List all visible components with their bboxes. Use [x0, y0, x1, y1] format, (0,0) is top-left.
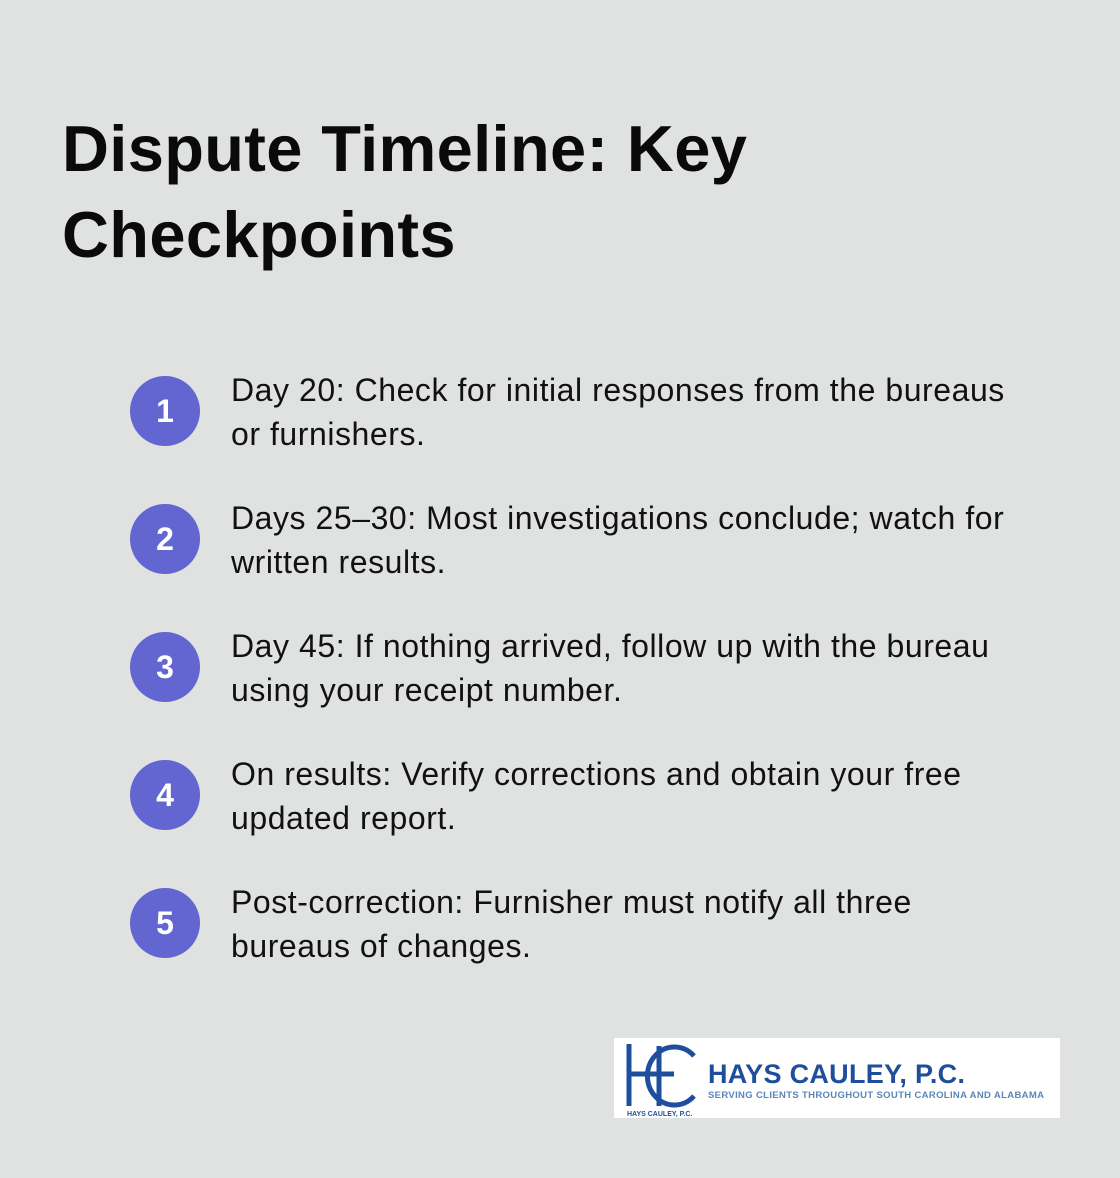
- item 1: 1: [156, 393, 174, 429]
- title: Dispute Timeline: Key: [62, 112, 747, 185]
- item 3: 3: [156, 649, 174, 685]
- item 4: 4: [156, 777, 174, 813]
- title: Checkpoints: [62, 198, 456, 271]
- item 1: or furnishers.: [231, 416, 425, 452]
- item 1: [130, 372, 1005, 452]
- item 3: Day 45: If nothing arrived, follow up with the bureau: [231, 628, 989, 664]
- logo: HAYS CAULEY, P.C.: [627, 1111, 692, 1118]
- item 4: On results: Verify corrections and obtain your free: [231, 756, 962, 792]
- item 3: using your receipt number.: [231, 672, 622, 708]
- title: [62, 112, 747, 271]
- item 4: updated report.: [231, 800, 456, 836]
- logo: [614, 1038, 1060, 1118]
- item 2: written results.: [231, 544, 446, 580]
- item 2: 2: [156, 521, 174, 557]
- item 5: 5: [156, 905, 174, 941]
- item 2: [130, 500, 1004, 580]
- item 3: [130, 628, 989, 708]
- item 5: bureaus of changes.: [231, 928, 531, 964]
- item 5: [130, 884, 912, 964]
- logo: SERVING CLIENTS THROUGHOUT SOUTH CAROLINA AND ALABAMA: [708, 1090, 1044, 1101]
- item 5: Post-correction: Furnisher must notify all three: [231, 884, 912, 920]
- item 4: [130, 756, 962, 836]
- logo: HAYS CAULEY, P.C.: [708, 1059, 965, 1089]
- item 1: Day 20: Check for initial responses from the bureaus: [231, 372, 1005, 408]
- item 2: Days 25–30: Most investigations conclude; watch for: [231, 500, 1004, 536]
